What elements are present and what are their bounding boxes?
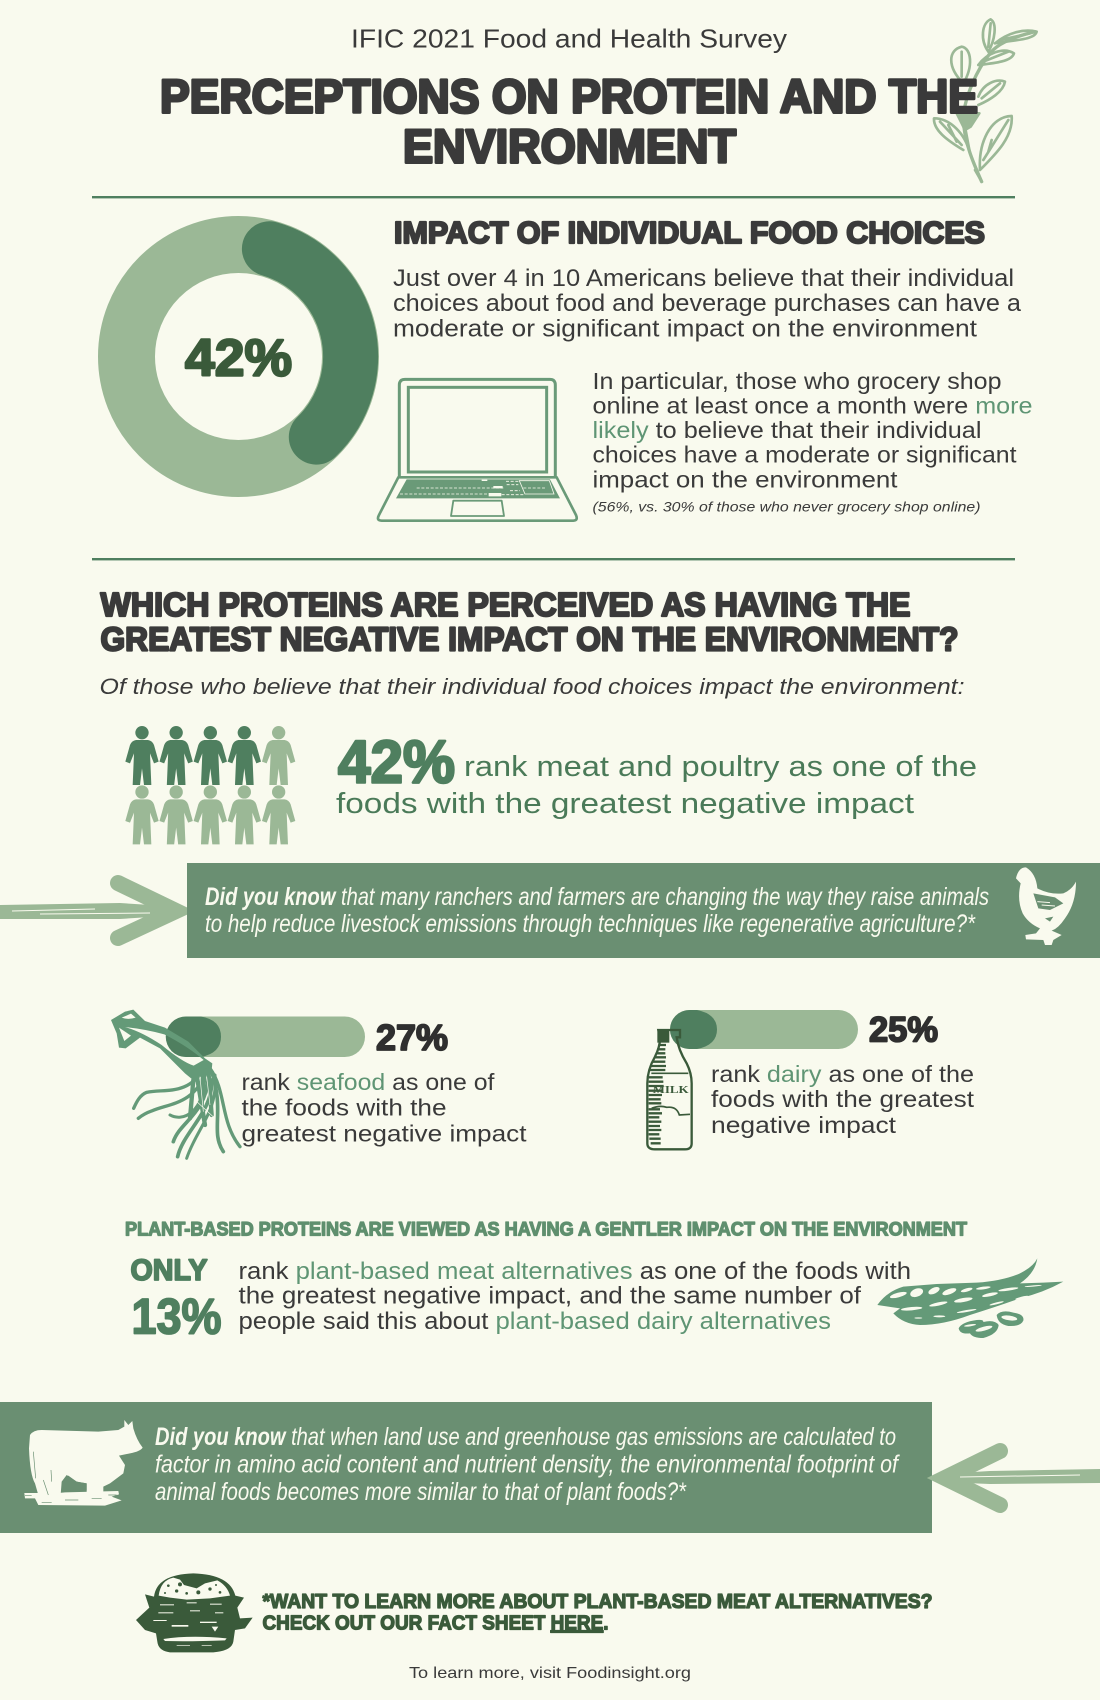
banner text: animal foods becomes more similar to that of plant foods?* xyxy=(155,1478,687,1506)
banner text: factor in amino acid content and nutrient density, the environmental footprint of xyxy=(155,1450,901,1478)
text block: 4 in 10 Americans xyxy=(393,265,1022,342)
text block: 4 in 10 Americans: Just over 4 in 10 Americans believe that their individual xyxy=(393,265,1014,292)
stat: 27% seafood xyxy=(242,1017,527,1146)
title: PERCEPTIONS ON PROTEIN AND THE xyxy=(160,70,978,122)
stat: 27% seafood: rank seafood as one of xyxy=(242,1069,495,1095)
stat: 27% seafood: 27% xyxy=(376,1017,448,1058)
intro line: Of those who believe that their individual food choices impact the environment: xyxy=(100,674,964,699)
stat: 25% dairy: 25% xyxy=(869,1010,938,1050)
panel: did you know, land use xyxy=(0,1402,932,1533)
survey label: IFIC 2021 Food and Health Survey xyxy=(351,24,787,54)
arrow: pointing to banner xyxy=(0,883,182,938)
donut chart: 42% xyxy=(126,244,351,468)
call to action: *WANT TO LEARN MORE ABOUT PLANT-BASED MEAT ALTERNATIVES? xyxy=(262,1591,932,1613)
stat: 25% dairy xyxy=(711,1010,975,1138)
stat: only 13%: ONLY xyxy=(130,1254,208,1287)
arrow: pointing to banner xyxy=(940,1451,1100,1505)
stat: 25% dairy: rank dairy as one of the xyxy=(711,1061,974,1087)
text block: online grocery shoppers: impact on the environment xyxy=(592,466,898,492)
icon: beans in pod xyxy=(877,1258,1063,1338)
stat: only 13% xyxy=(130,1254,222,1344)
stat: 42% meat and poultry xyxy=(336,728,977,820)
text block: plant-based alternatives: people said this about plant-based dairy alternatives xyxy=(238,1308,831,1335)
banner text xyxy=(155,1423,901,1506)
stat: 25% dairy: foods with the greatest xyxy=(711,1086,975,1112)
text block: plant-based alternatives: rank plant-based meat alternatives as one of the foods with xyxy=(238,1258,911,1285)
heading: which proteins xyxy=(100,586,958,658)
bar chart: seafood 27% xyxy=(166,1016,365,1057)
icon: milk bottle xyxy=(647,1029,692,1149)
call to action xyxy=(262,1591,932,1634)
title: ENVIRONMENT xyxy=(403,120,736,172)
icon: cow xyxy=(24,1420,143,1506)
icon: 10 people, 4 highlighted xyxy=(125,726,295,844)
footnote: (56%, vs. 30% of those who never grocery shop online) xyxy=(592,498,980,514)
icon: burger xyxy=(136,1573,253,1652)
bar chart: dairy 25% xyxy=(670,1010,858,1049)
subheading: plant-based proteins: PLANT-BASED PROTEINS ARE VIEWED AS HAVING A GENTLER IMPACT ON THE ENVIRONMENT xyxy=(125,1220,967,1240)
text block: online grocery shoppers xyxy=(592,368,1032,514)
text block: online grocery shoppers: likely to believe that their individual xyxy=(592,417,982,443)
heading: which proteins: WHICH PROTEINS ARE PERCEIVED AS HAVING THE xyxy=(100,586,910,623)
footer: To learn more, visit Foodinsight.org xyxy=(409,1665,691,1682)
stat: 27% seafood: the foods with the xyxy=(242,1094,446,1120)
stat: 42% meat and poultry: foods with the greatest negative impact xyxy=(336,788,914,820)
stat: 42% meat and poultry: 42% xyxy=(338,728,455,796)
icon: chicken xyxy=(1016,867,1076,945)
text block: plant-based alternatives: the greatest negative impact, and the same number of xyxy=(238,1282,861,1310)
text block: plant-based alternatives xyxy=(238,1258,911,1335)
milk label: MILK xyxy=(653,1085,689,1096)
heading: which proteins: GREATEST NEGATIVE IMPACT ON THE ENVIRONMENT? xyxy=(100,620,958,658)
text block: 4 in 10 Americans: choices about food and beverage purchases can have a xyxy=(393,290,1022,317)
stat: only 13%: 13% xyxy=(132,1288,222,1344)
banner text xyxy=(205,883,989,938)
text block: 4 in 10 Americans: moderate or significant impact on the environment xyxy=(393,316,977,342)
panel: did you know, ranchers xyxy=(187,863,1100,958)
stat: 25% dairy: negative impact xyxy=(711,1112,897,1138)
text block: online grocery shoppers: choices have a moderate or significant xyxy=(592,442,1017,468)
call to action: CHECK OUT OUR FACT SHEET HERE. xyxy=(262,1612,608,1634)
title xyxy=(160,70,978,172)
text block: online grocery shoppers: online at least once a month were more xyxy=(592,392,1032,418)
icon: herb sprig xyxy=(934,19,1037,182)
heading: impact of individual food choices: IMPACT OF INDIVIDUAL FOOD CHOICES xyxy=(394,215,985,250)
stat: 42% meat and poultry: rank meat and poultry as one of the xyxy=(464,751,977,783)
text block: online grocery shoppers: In particular, those who grocery shop xyxy=(592,368,1002,394)
banner text: Did you know that when land use and greenhouse gas emissions are calculated to xyxy=(155,1423,896,1451)
icon: laptop xyxy=(378,379,577,521)
donut value: 42% xyxy=(185,330,292,388)
icon: seaweed / seafood xyxy=(111,1010,240,1158)
stat: 27% seafood: greatest negative impact xyxy=(242,1120,527,1146)
